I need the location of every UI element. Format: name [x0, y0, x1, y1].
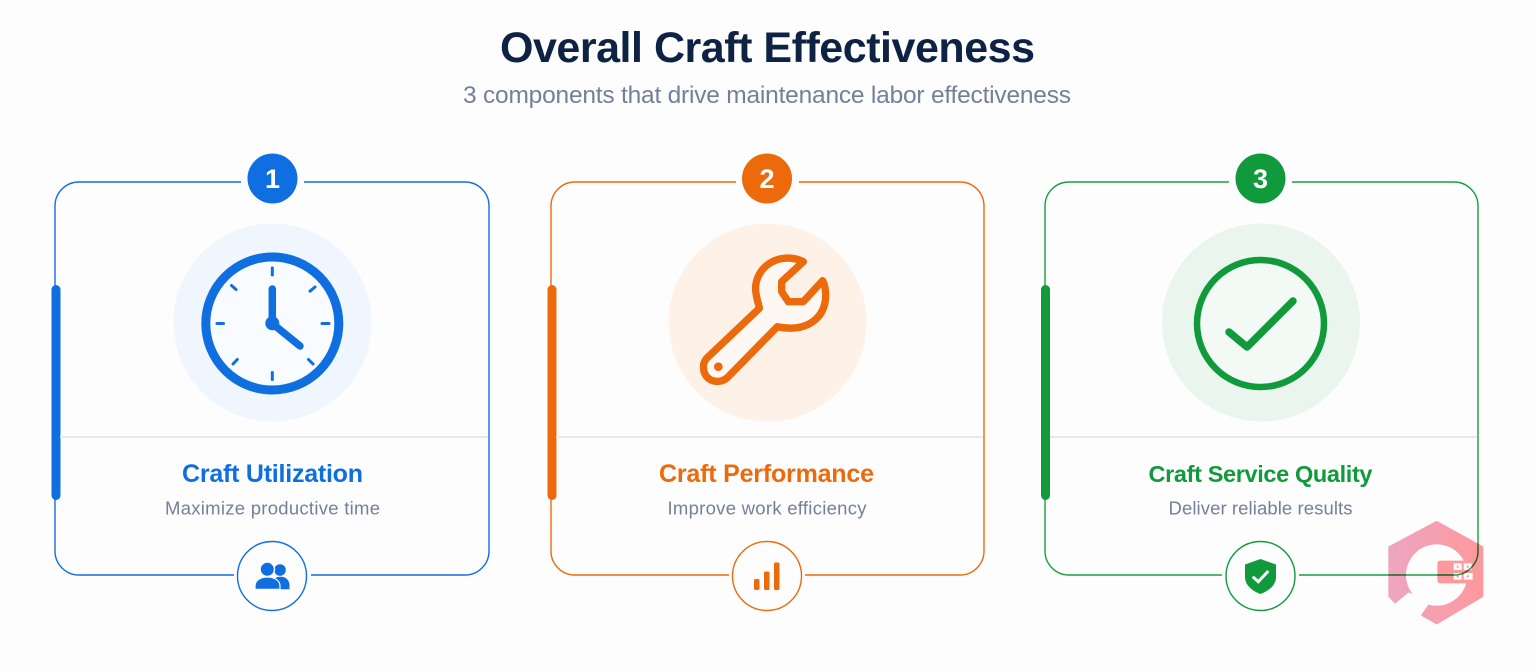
title: Overall Craft Effectiveness	[500, 24, 1035, 72]
icon: clock	[206, 257, 339, 390]
number badge	[248, 154, 298, 204]
panel heading: Craft Performance	[659, 460, 874, 488]
number badge: 3	[1253, 164, 1268, 194]
panel description: Improve work efficiency	[668, 498, 867, 518]
icon: bar chart	[732, 542, 802, 610]
number badge	[742, 154, 792, 204]
divider	[556, 436, 983, 438]
number badge: 2	[759, 164, 775, 194]
panel heading: Craft Utilization	[182, 460, 363, 488]
panel: craft performance	[548, 154, 984, 610]
icon circle	[1162, 224, 1360, 422]
card outline	[55, 182, 489, 575]
number badge: 1	[265, 164, 280, 194]
accent bar	[52, 285, 60, 500]
icon: people	[238, 542, 306, 610]
icon: check mark	[1197, 260, 1324, 387]
panel description: Maximize productive time	[165, 498, 380, 518]
icon: wrench	[703, 258, 826, 381]
card outline	[1045, 182, 1478, 575]
card outline	[551, 182, 984, 575]
watermark logo	[1390, 522, 1482, 623]
panel: craft utilization	[52, 154, 489, 610]
panel description: Deliver reliable results	[1168, 498, 1352, 518]
icon circle	[668, 224, 866, 422]
divider	[1050, 436, 1477, 438]
divider	[60, 436, 488, 438]
icon: shield	[1226, 542, 1295, 610]
accent bar	[1041, 285, 1050, 500]
subtitle: 3 components that drive maintenance labor effectiveness	[463, 82, 1071, 109]
panel heading: Craft Service Quality	[1148, 461, 1372, 487]
icon circle	[174, 224, 372, 422]
accent bar	[548, 285, 556, 500]
number badge	[1236, 154, 1286, 204]
panel: craft service quality	[1041, 154, 1478, 610]
